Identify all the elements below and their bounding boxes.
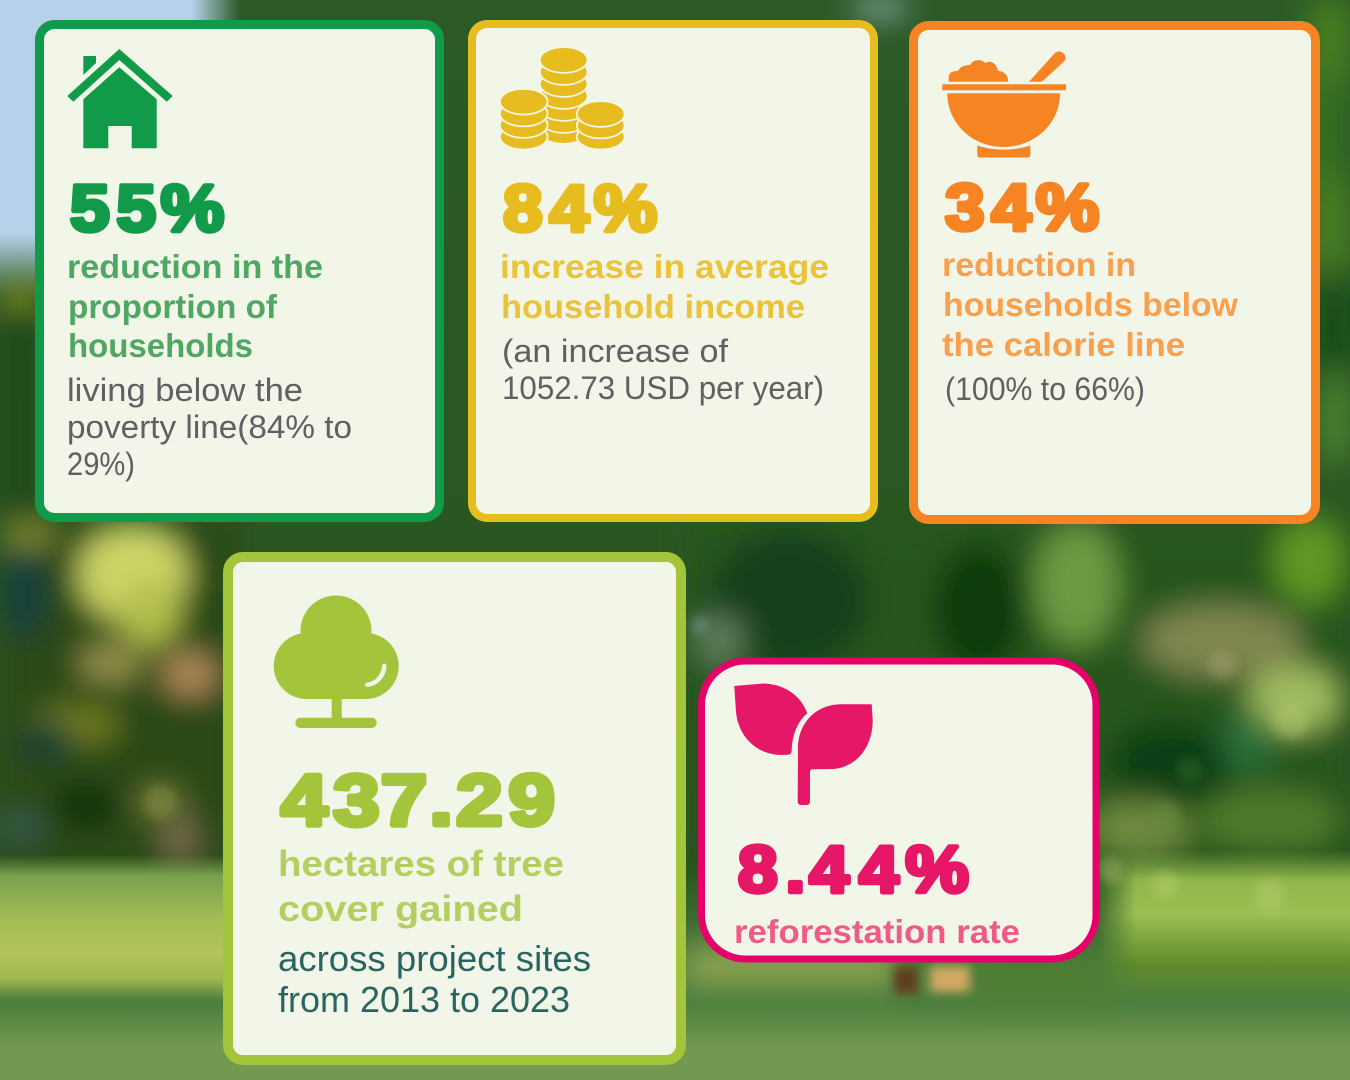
heading: hectares of tree cover gained: hectares of tree — [278, 843, 564, 884]
statistic: 437.29: 437.29 — [281, 759, 555, 841]
heading: increase in average household income: increase in average — [500, 248, 829, 285]
panel: tree cover — [228, 557, 681, 1060]
heading: hectares of tree cover gained — [278, 843, 564, 929]
text: income increase detail: (an increase of — [502, 333, 728, 369]
text: poverty line detail: poverty line(84% to — [67, 409, 352, 445]
text: income increase detail: 1052.73 USD per year) — [502, 370, 824, 406]
panel: calorie line — [914, 26, 1316, 520]
statistic: 55%: 55% — [70, 171, 224, 245]
text: poverty line detail: 29%) — [67, 446, 135, 482]
heading: reduction in households below the calorie line: reduction in — [942, 246, 1136, 283]
icon: sprout — [734, 684, 873, 805]
panel: reforestation rate — [702, 661, 1096, 959]
text: poverty line detail: living below the — [67, 372, 303, 408]
heading: reduction in the proportion of households: proportion of — [68, 288, 278, 325]
text: poverty line detail — [67, 372, 352, 482]
text: income increase detail — [502, 333, 824, 406]
icon: coin stacks — [501, 48, 624, 149]
heading: reduction in households below the calorie line: the calorie line — [942, 326, 1185, 363]
statistic: 84%: 84% — [503, 171, 657, 245]
text: project sites detail: across project sites — [278, 938, 591, 979]
icon: tree — [274, 596, 399, 728]
panel: poverty reduction — [40, 24, 440, 518]
text: project sites detail: from 2013 to 2023 — [278, 979, 570, 1020]
heading: hectares of tree cover gained: cover gained — [278, 888, 523, 929]
heading: reforestation rate: reforestation rate — [734, 913, 1020, 950]
heading: reduction in households below the calorie line — [942, 246, 1238, 363]
statistic: 34%: 34% — [945, 170, 1099, 244]
icon: house — [67, 49, 173, 148]
heading: reduction in households below the calorie line: households below — [943, 286, 1238, 323]
heading: increase in average household income: household income — [501, 288, 805, 325]
text: project sites detail — [278, 938, 591, 1020]
statistic: 8.44%: 8.44% — [738, 832, 969, 906]
heading: reduction in the proportion of households: households — [68, 327, 253, 364]
panel: household income — [472, 24, 874, 518]
icon: bowl of food — [942, 51, 1066, 158]
text: calorie detail: (100% to 66%) — [945, 371, 1145, 407]
heading: reduction in the proportion of households: reduction in the — [67, 248, 323, 285]
heading: increase in average household income — [500, 248, 829, 325]
heading: reduction in the proportion of households — [67, 248, 323, 364]
